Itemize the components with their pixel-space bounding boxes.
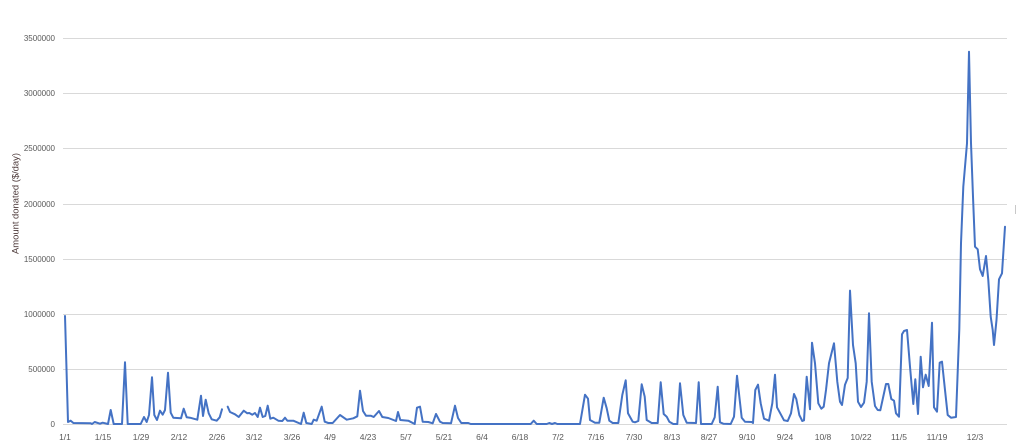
x axis date labels: 4/9 xyxy=(324,432,336,442)
x axis date labels: 9/10 xyxy=(739,432,756,442)
data series line xyxy=(65,52,1005,424)
x axis date labels: 11/19 xyxy=(927,432,948,442)
x axis date labels: 10/8 xyxy=(815,432,832,442)
x axis date labels: 3/12 xyxy=(246,432,263,442)
x axis date labels: 7/30 xyxy=(626,432,643,442)
edge marker: cropped grey handle xyxy=(1015,205,1016,214)
x axis date labels: 5/7 xyxy=(400,432,412,442)
x axis date labels: 6/4 xyxy=(476,432,488,442)
x axis date labels: 5/21 xyxy=(436,432,453,442)
x axis date labels: 7/2 xyxy=(552,432,564,442)
y axis tick labels: 3500000 xyxy=(24,34,56,43)
x axis date labels: 12/3 xyxy=(967,432,984,442)
y axis tick labels: 500000 xyxy=(28,365,56,374)
y axis tick labels: 1500000 xyxy=(24,255,56,264)
y axis tick labels: 0 xyxy=(51,420,56,429)
x axis date labels: 6/18 xyxy=(512,432,529,442)
y axis title: Amount donated ($/day) xyxy=(10,153,20,254)
y axis tick labels: 3000000 xyxy=(24,89,56,98)
x axis date labels: 8/13 xyxy=(664,432,681,442)
x axis date labels: 8/27 xyxy=(701,432,718,442)
x axis date labels: 11/5 xyxy=(891,432,907,442)
y axis tick labels xyxy=(24,34,56,429)
x axis date labels: 3/26 xyxy=(284,432,301,442)
y axis tick labels: 2500000 xyxy=(24,144,56,153)
x axis date labels: 7/16 xyxy=(588,432,605,442)
x axis date labels: 1/15 xyxy=(95,432,112,442)
x axis date labels: 1/29 xyxy=(133,432,150,442)
x axis date labels: 10/22 xyxy=(850,432,872,442)
y axis tick labels: 1000000 xyxy=(24,310,56,319)
x axis date labels: 2/26 xyxy=(209,432,226,442)
x axis date labels: 1/1 xyxy=(59,432,71,442)
x axis date labels: 4/23 xyxy=(360,432,377,442)
x axis date labels: 2/12 xyxy=(171,432,188,442)
x axis date labels xyxy=(59,432,984,442)
y axis tick labels: 2000000 xyxy=(24,200,56,209)
x axis date labels: 9/24 xyxy=(777,432,794,442)
